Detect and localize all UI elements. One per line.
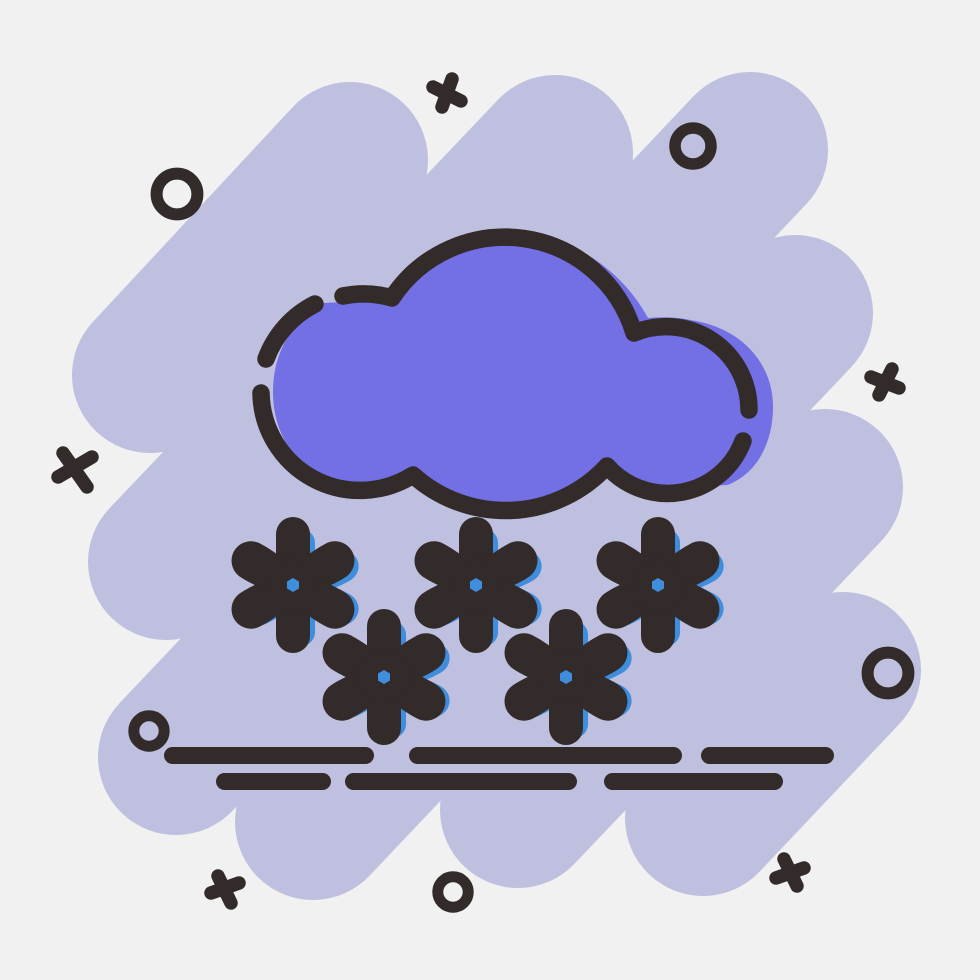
decorative crosses — [58, 79, 899, 903]
decorative rings — [134, 128, 908, 907]
ground snow lines — [164, 747, 834, 790]
cloud outline — [261, 237, 749, 511]
cloud fill — [273, 232, 773, 506]
snowflakes — [224, 517, 731, 745]
background blob — [150, 150, 843, 822]
